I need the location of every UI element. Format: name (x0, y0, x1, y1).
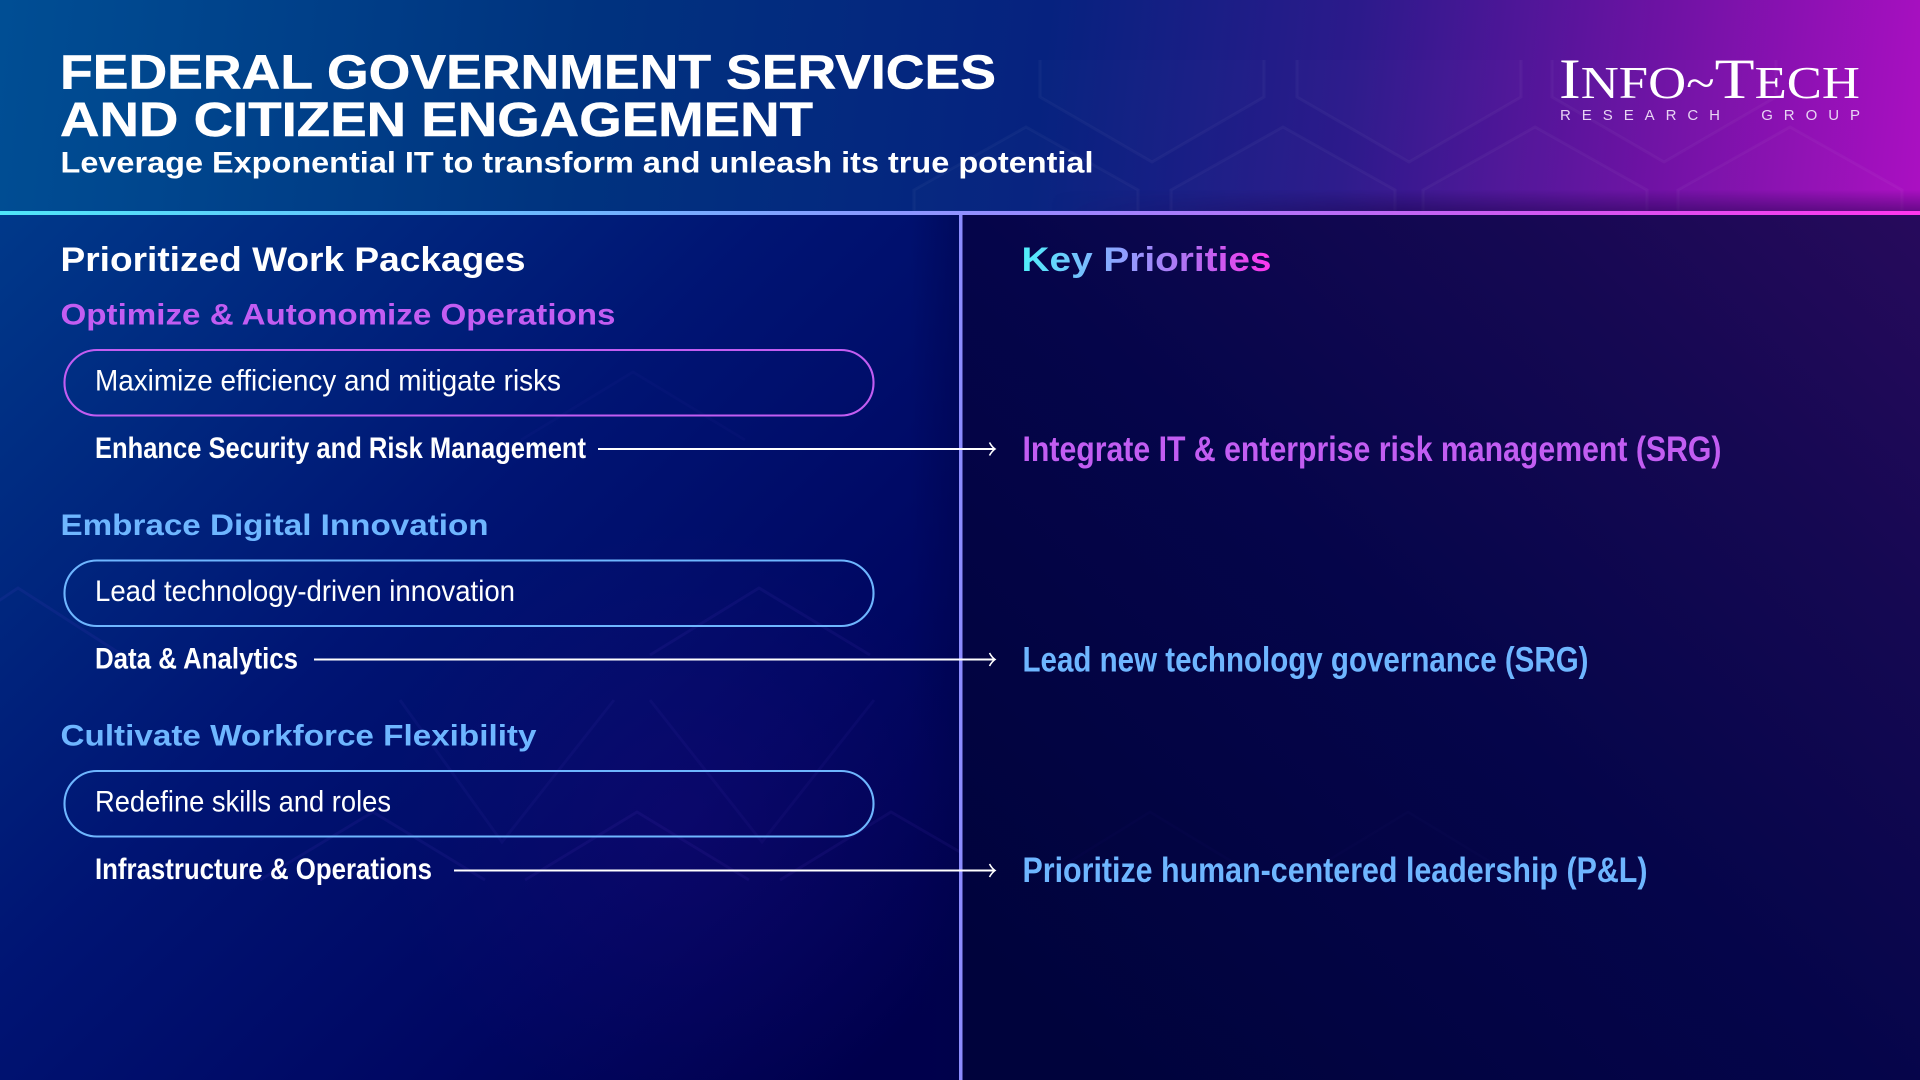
group: optimize and autonomize operations (60, 298, 874, 465)
group: embrace digital innovation: Data & Analytics (95, 642, 298, 676)
title (60, 46, 996, 147)
group: cultivate workforce flexibility: Cultivate Workforce Flexibility (60, 720, 537, 752)
panel: prioritized work packages (60, 241, 874, 886)
group: cultivate workforce flexibility: Infrastructure & Operations (95, 853, 432, 886)
group: cultivate workforce flexibility (60, 720, 874, 886)
heading: key priorities: Key Priorities (1022, 241, 1272, 279)
subtitle: Leverage Exponential IT to transform and unleash its true potential (60, 146, 1094, 180)
background hexagon pattern (0, 372, 1520, 880)
group: embrace digital innovation: Lead technology-driven innovation (95, 575, 515, 608)
panel: key priorities (1022, 241, 1722, 890)
group: embrace digital innovation (60, 509, 874, 676)
group: cultivate workforce flexibility: Redefine skills and roles (95, 786, 391, 818)
title: FEDERAL GOVERNMENT SERVICES (60, 46, 996, 100)
group: optimize and autonomize operations: Optimize & Autonomize Operations (60, 298, 616, 332)
group: optimize and autonomize operations: Enhance Security and Risk Management (95, 432, 586, 465)
group: optimize and autonomize operations: Maximize efficiency and mitigate risks (95, 364, 561, 398)
header band (0, 0, 1920, 212)
group: embrace digital innovation: Embrace Digital Innovation (60, 509, 489, 542)
vertical divider (959, 215, 962, 1080)
title: AND CITIZEN ENGAGEMENT (60, 93, 813, 147)
priority 1: Integrate IT & enterprise risk management (SRG) (1022, 430, 1722, 469)
gradient horizontal rule (0, 211, 1920, 215)
heading: prioritized work packages: Prioritized Work Packages (60, 241, 526, 279)
logo: Info-Tech Research Group: INFO~ TECH (1559, 48, 1860, 111)
arrow 1 (598, 442, 995, 456)
priority 3: Prioritize human-centered leadership (P&L) (1022, 851, 1648, 890)
arrow 3 (454, 864, 995, 877)
priority 2: Lead new technology governance (SRG) (1022, 640, 1588, 680)
logo: Info-Tech Research Group: RESEARCH GROUP (1560, 107, 1860, 124)
arrow 2 (314, 653, 995, 666)
